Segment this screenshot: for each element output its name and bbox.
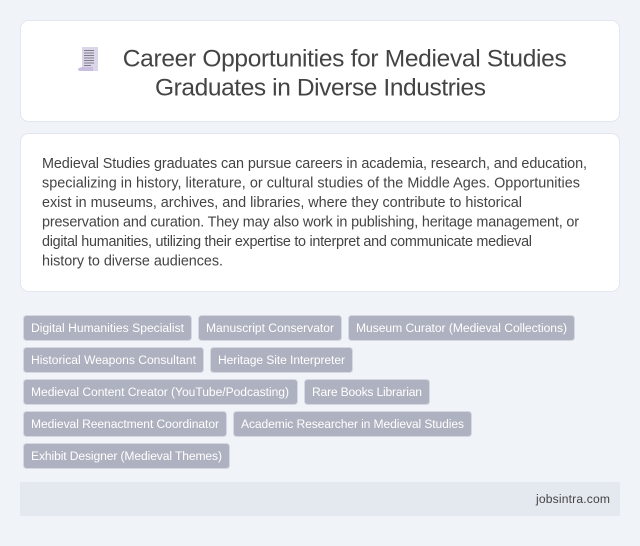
tag: Manuscript Conservator [206,321,334,335]
panel: description [20,134,620,292]
tag [24,444,230,468]
tag: Exhibit Designer (Medieval Themes) [31,449,222,463]
tag [24,348,204,372]
text block: description: exist in museums, archives, and libraries, where they contribute to historical [42,195,522,211]
icon: manuscript scroll [78,47,98,71]
tag [24,412,226,436]
tag: Rare Books Librarian [312,385,422,399]
title: Graduates in Diverse Industries [155,74,486,102]
tag [210,348,352,372]
tag: Academic Researcher in Medieval Studies [241,417,464,431]
text block: description [42,156,587,270]
tag [304,380,430,404]
text block: description: digital humanities, utilizing their expertise to interpret and communicate medieval [42,234,532,250]
tag: Heritage Site Interpreter [218,353,345,367]
text block: description: Medieval Studies graduates can pursue careers in academia, research, and education, [42,156,587,172]
tag [24,316,192,340]
tag [24,380,298,404]
tag: Museum Curator (Medieval Collections) [356,321,567,335]
tag: Digital Humanities Specialist [31,321,185,335]
tag: Historical Weapons Consultant [31,353,197,367]
text block: description: preservation and curation. They may also work in publishing, heritage management, or [42,214,579,230]
panel: title card [20,20,620,122]
tag [348,316,574,340]
tag [198,316,342,340]
text block: description: specializing in history, literature, or cultural studies of the Middle Ages. Opportunities [42,176,580,192]
tag: Medieval Content Creator (YouTube/Podcasting) [31,385,289,399]
tag list [24,316,574,468]
title: Career Opportunities for Medieval Studies [123,46,567,72]
tag: Medieval Reenactment Coordinator [31,417,219,431]
footer text: jobsintra.com [535,492,610,506]
footer [20,482,620,516]
tag [234,412,472,436]
text block: description: history to diverse audiences. [42,254,223,270]
